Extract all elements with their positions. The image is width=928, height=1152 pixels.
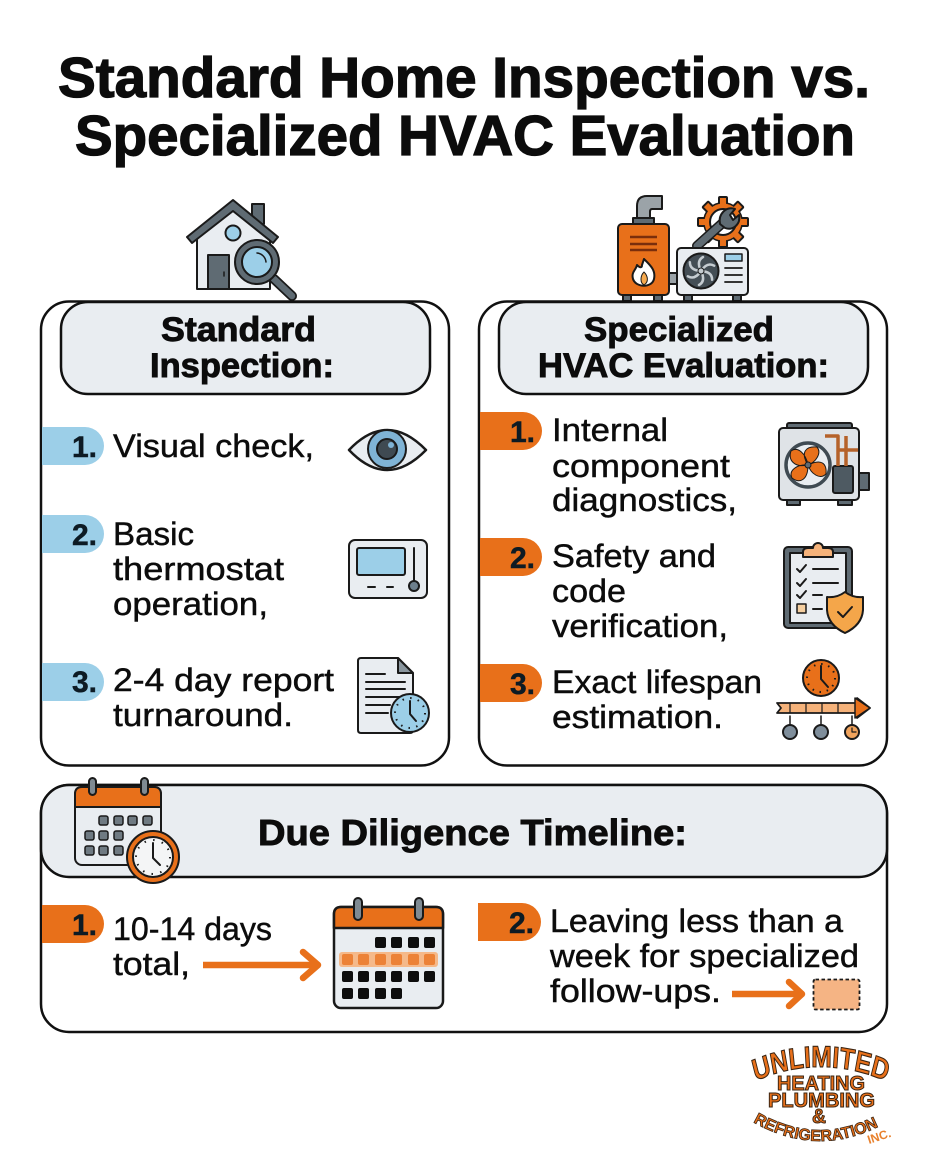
item 1: 10-14 days total: 10-14 days <box>113 911 272 947</box>
item 2: leaving less than a week: Leaving less than a <box>550 903 843 939</box>
item 2: basic thermostat operation: 2. <box>72 519 97 552</box>
item 2: safety and code verification: 2. <box>510 542 535 575</box>
panel heading: standard inspection: Standard <box>161 311 316 349</box>
item 1: visual check: Visual check, <box>113 428 314 464</box>
logo: Unlimited Heating Plumbing & Refrigeration: UNLIMITED <box>751 1046 889 1080</box>
icon: report with clock <box>358 658 429 733</box>
panel: standard inspection <box>41 302 449 766</box>
item 3: exact lifespan estimation: 3. <box>510 668 535 701</box>
title <box>58 46 870 168</box>
item 1: 10-14 days total: total, <box>113 946 190 982</box>
logo: Unlimited Heating Plumbing & Refrigeration: & <box>812 1106 826 1128</box>
item 2: leaving less than a week: 2. <box>509 907 534 940</box>
icon: thermostat <box>349 540 427 598</box>
item 3: 2-4 day report turnaround: 3. <box>72 666 97 699</box>
logo: Unlimited Heating Plumbing & Refrigeration: HEATING <box>777 1073 865 1095</box>
item 1: internal component diagnostics: 1. <box>510 416 535 449</box>
item 1: 10-14 days total <box>42 905 272 982</box>
item 3: 2-4 day report turnaround: 2-4 day report <box>113 662 334 698</box>
title: Specialized HVAC Evaluation <box>75 104 855 168</box>
panel heading: due diligence timeline: Due Diligence Timeline: <box>258 812 687 853</box>
title: Standard Home Inspection vs. <box>58 46 870 110</box>
item 2: leaving less than a week: week for specialized <box>549 938 859 974</box>
panel heading: specialized HVAC evaluation: HVAC Evaluation: <box>538 347 829 385</box>
item 2: safety and code verification: Safety and <box>552 538 716 574</box>
item 2: basic thermostat operation: operation, <box>113 586 268 622</box>
item 2: basic thermostat operation <box>42 515 284 622</box>
item 2: basic thermostat operation: Basic <box>113 516 194 552</box>
logo: Unlimited Heating Plumbing & Refrigeration <box>751 1046 893 1147</box>
icon: furnace and AC with gear <box>618 196 748 301</box>
item 1: 10-14 days total: 1. <box>72 909 97 942</box>
panel: specialized HVAC evaluation <box>479 302 887 766</box>
item 1: visual check <box>42 427 314 465</box>
item 2: safety and code verification: verification, <box>552 608 728 644</box>
panel heading: standard inspection <box>61 302 430 394</box>
icon: outdoor AC unit internals <box>779 423 869 505</box>
item 1: internal component diagnostics: Internal <box>552 412 668 448</box>
arrow: to calendar <box>203 952 318 978</box>
icon: lifespan timeline <box>777 660 870 739</box>
panel heading: standard inspection: Inspection: <box>150 347 334 385</box>
item 2: safety and code verification: code <box>552 573 626 609</box>
panel heading: specialized HVAC evaluation <box>499 302 868 394</box>
item 2: leaving less than a week <box>478 903 859 1009</box>
arrow: to follow-up window <box>732 982 802 1006</box>
item 3: 2-4 day report turnaround: turnaround. <box>113 697 293 733</box>
logo: Unlimited Heating Plumbing & Refrigeration: INC. <box>866 1126 893 1147</box>
icon: calendar with highlighted week <box>334 898 443 1008</box>
item 3: exact lifespan estimation: Exact lifespan <box>552 664 762 700</box>
item 2: safety and code verification <box>480 538 728 644</box>
logo: Unlimited Heating Plumbing & Refrigeration: REFRIGERATION <box>754 1112 878 1142</box>
item 1: visual check: 1. <box>72 431 97 464</box>
item 1: internal component diagnostics <box>480 412 737 518</box>
item 3: exact lifespan estimation <box>480 664 762 735</box>
item 1: internal component diagnostics: diagnostics, <box>552 482 737 518</box>
panel heading: due diligence timeline <box>41 785 887 877</box>
icon: dashed follow-up window <box>814 980 860 1010</box>
item 2: basic thermostat operation: thermostat <box>113 551 284 587</box>
icon: calendar with clock <box>75 778 179 883</box>
item 3: exact lifespan estimation: estimation. <box>552 699 723 735</box>
logo: Unlimited Heating Plumbing & Refrigeration: PLUMBING <box>768 1090 875 1112</box>
icon: house with magnifying glass <box>187 200 292 296</box>
panel heading: specialized HVAC evaluation: Specialized <box>584 311 774 349</box>
panel: due diligence timeline <box>41 778 887 1032</box>
item 2: leaving less than a week: follow-ups. <box>550 973 721 1009</box>
icon: clipboard with shield <box>784 543 863 633</box>
item 1: internal component diagnostics: component <box>552 448 730 484</box>
item 3: 2-4 day report turnaround <box>42 662 334 733</box>
icon: eye <box>349 430 426 470</box>
